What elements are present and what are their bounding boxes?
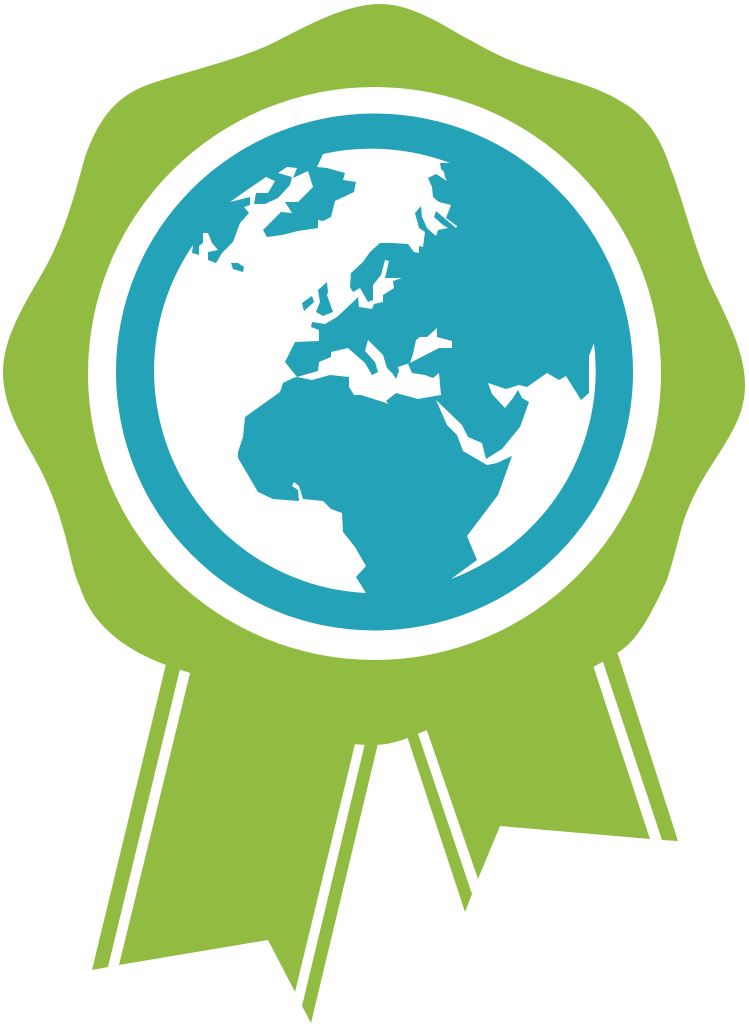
white ring [88, 87, 661, 660]
right ribbon tail [405, 645, 678, 912]
eastern ocean [436, 343, 596, 579]
island: north [231, 263, 244, 272]
globe map [154, 149, 596, 593]
teal globe disc [116, 114, 633, 630]
western ocean [154, 149, 457, 593]
left ribbon tail [92, 660, 380, 1023]
green wavy seal [3, 4, 745, 745]
island: ireland [302, 296, 314, 311]
island: great britain [316, 282, 333, 316]
